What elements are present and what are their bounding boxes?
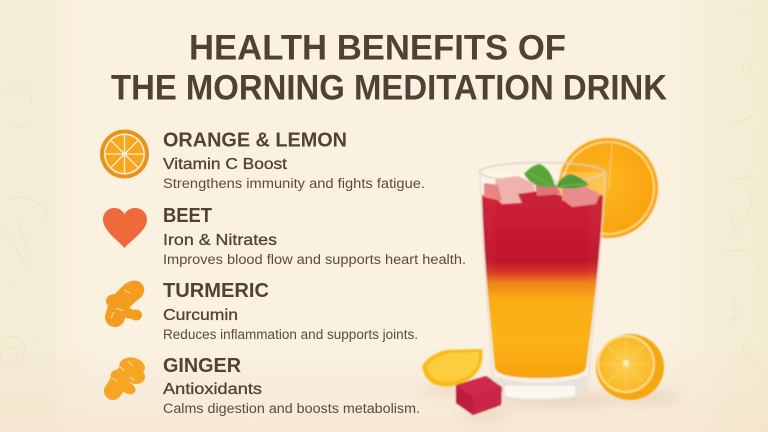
mint leaves [524, 164, 589, 189]
lemon half [589, 327, 664, 401]
benefit: beet [103, 204, 466, 267]
icon: orange slice [100, 130, 149, 178]
text: turmeric: Reduces inflammation and supports joints. [163, 327, 418, 342]
orange slice garnish [558, 138, 658, 238]
ice cubes [484, 176, 600, 208]
shadows [422, 386, 680, 418]
glass [480, 162, 606, 401]
title: THE MORNING MEDITATION DRINK [111, 68, 667, 108]
lemon wedge [422, 349, 482, 387]
title: HEALTH BENEFITS OF [189, 28, 566, 68]
text: orange and lemon: ORANGE & LEMON [163, 128, 347, 152]
icon: turmeric root [106, 277, 148, 320]
text: beet: Improves blood flow and supports heart health. [163, 252, 466, 267]
text: beet: Iron & Nitrates [163, 232, 277, 249]
text: beet: BEET [163, 204, 212, 227]
beet cube [456, 376, 502, 415]
text: turmeric [163, 279, 418, 342]
text: turmeric: Curcumin [163, 307, 238, 324]
benefit: orange and lemon [100, 128, 425, 191]
text: ginger: GINGER [163, 354, 241, 377]
text: orange and lemon: Strengthens immunity and fights fatigue. [163, 176, 425, 191]
text: ginger [163, 354, 420, 416]
text: ginger: Calms digestion and boosts metabolism. [163, 401, 420, 416]
text: ginger: Antioxidants [163, 381, 262, 398]
text: beet [163, 204, 466, 267]
icon: ginger root [110, 355, 146, 397]
title [111, 28, 667, 108]
juice [482, 195, 603, 378]
text: orange and lemon: Vitamin C Boost [163, 156, 288, 173]
icon: heart [103, 208, 147, 248]
benefit: turmeric [106, 277, 418, 342]
drink illustration [422, 138, 680, 418]
text: orange and lemon [163, 128, 425, 191]
text: turmeric: TURMERIC [163, 279, 269, 302]
benefit: ginger [110, 354, 420, 416]
